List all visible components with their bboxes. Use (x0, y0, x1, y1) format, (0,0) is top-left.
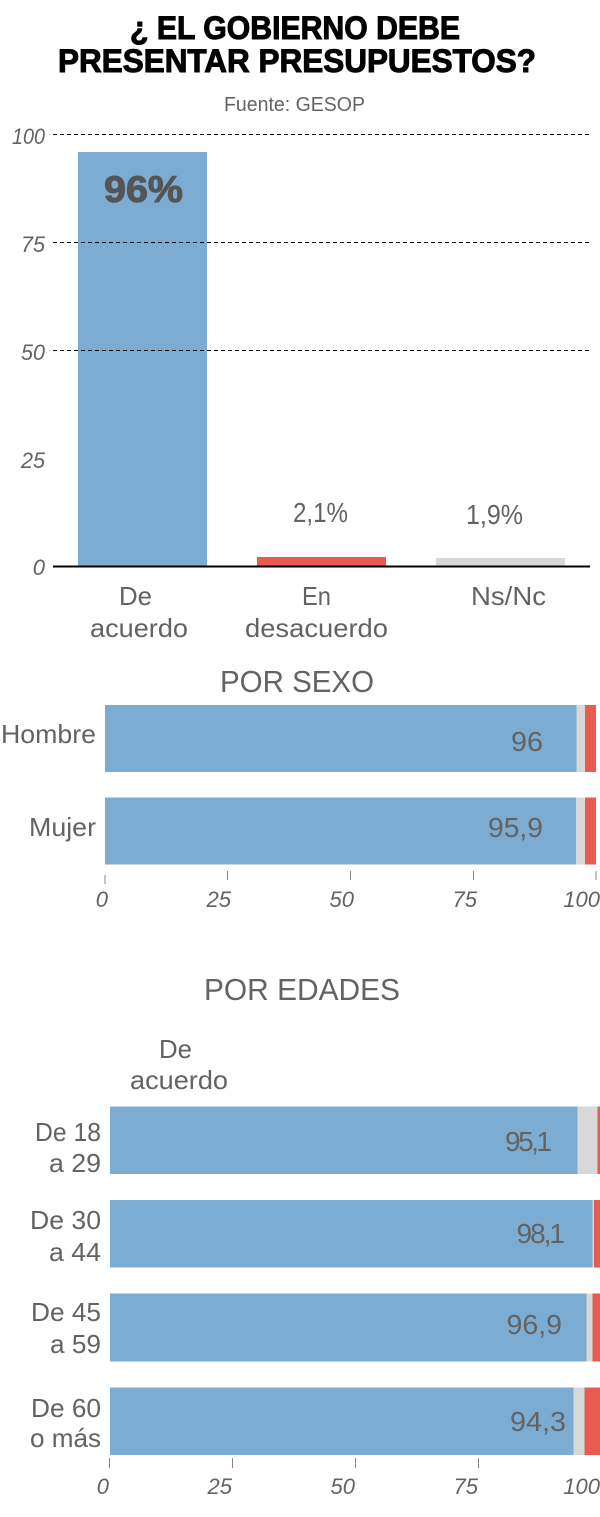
value: 2,1%: 2,1% (293, 497, 348, 528)
row: Hombre: Hombre (1, 719, 96, 749)
x axis: 25 (207, 1474, 233, 1499)
row: Hombre (1, 705, 596, 772)
category label: De acuerdo (90, 581, 188, 643)
column label: De acuerdo (130, 1034, 228, 1095)
row: De 45 a 59: 96,9 (506, 1309, 562, 1340)
x axis: 50 (331, 1474, 356, 1499)
category label: En desacuerdo (245, 581, 388, 643)
bar: En desacuerdo (257, 557, 386, 566)
row: De 30 a 44: a 44 (49, 1237, 101, 1267)
stacked bars: por sexo (1, 705, 600, 912)
source note: Fuente: GESOP (224, 94, 365, 116)
row: De 18 a 29 (35, 1106, 600, 1178)
x axis: 100 (563, 887, 600, 912)
x axis: 25 (206, 887, 232, 912)
title: PRESENTAR PRESUPUESTOS? (58, 43, 536, 79)
row: De 60 o más (30, 1388, 600, 1455)
heading: por edades: POR EDADES (204, 972, 400, 1007)
x axis (96, 871, 600, 912)
row: De 60 o más: 94,3 (510, 1406, 566, 1437)
column chart: overall answers (12, 124, 590, 643)
x axis: 75 (453, 887, 478, 912)
stacked bars: por edades (30, 1106, 600, 1499)
category label: En desacuerdo: desacuerdo (245, 613, 388, 643)
row: De 45 a 59: a 59 (50, 1329, 101, 1359)
value: 96%: 96% (104, 169, 183, 210)
category label: De acuerdo: acuerdo (90, 613, 188, 643)
y axis labels: 75 (21, 232, 46, 257)
row: Mujer: Mujer (29, 812, 96, 842)
x axis: 100 (563, 1474, 600, 1499)
title: ¿ EL GOBIERNO DEBE (130, 10, 460, 46)
row: De 45 a 59 (31, 1294, 600, 1362)
bar: Ns/Nc (436, 558, 565, 566)
row: De 30 a 44: De 30 (30, 1205, 101, 1235)
row: De 45 a 59: De 45 (31, 1297, 101, 1327)
column label: De acuerdo: De (159, 1034, 192, 1064)
y axis labels: 25 (20, 448, 46, 473)
row: De 18 a 29: a 29 (49, 1148, 101, 1178)
bar: De acuerdo (78, 152, 207, 566)
x axis: 0 (96, 887, 109, 912)
title (58, 10, 536, 79)
y axis labels: 0 (33, 555, 46, 580)
row: De 60 o más: o más (30, 1423, 101, 1453)
column label: De acuerdo: acuerdo (130, 1065, 228, 1095)
row: De 60 o más: De 60 (31, 1393, 101, 1423)
y axis labels (12, 124, 46, 580)
x axis: 75 (454, 1474, 479, 1499)
row: De 18 a 29: De 18 (35, 1117, 101, 1147)
y axis labels: 50 (21, 340, 46, 365)
row: De 18 a 29: 95,1 (505, 1126, 552, 1157)
row: Mujer: 95,9 (488, 812, 543, 843)
row: De 30 a 44 (30, 1200, 600, 1268)
row: De 30 a 44: 98,1 (516, 1218, 565, 1249)
x axis: 0 (97, 1474, 110, 1499)
category label: En desacuerdo: En (302, 581, 331, 611)
row: Hombre: 96 (511, 726, 543, 757)
heading: por sexo: POR SEXO (220, 664, 374, 699)
value: 1,9%: 1,9% (466, 499, 523, 530)
x axis: 50 (330, 887, 355, 912)
y axis labels: 100 (12, 124, 46, 149)
category label: De acuerdo: De (119, 581, 152, 611)
row: Mujer (29, 798, 596, 864)
x axis (97, 1458, 600, 1499)
category label: Ns/Nc: Ns/Nc (471, 581, 546, 611)
